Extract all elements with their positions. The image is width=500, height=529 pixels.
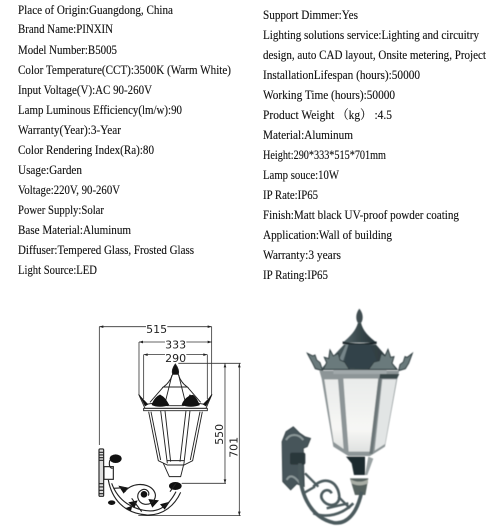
dimension arrowheads [99, 325, 241, 516]
right specification list: Product Weight （kg） :4.5 [263, 108, 392, 122]
dimension labels: 333 [165, 339, 186, 352]
right specification list: Lighting solutions service:Lighting and circuitry [263, 28, 480, 42]
left specification list: Brand Name:PINXIN [18, 22, 113, 36]
left specification list: Diffuser:Tempered Glass, Frosted Glass [18, 243, 194, 257]
right specification list: Material:Aluminum [263, 128, 353, 142]
left specification list: Power Supply:Solar [18, 203, 105, 217]
left specification list: Warranty(Year):3-Year [18, 123, 122, 137]
lantern finial [356, 309, 363, 323]
right specification list: Finish:Matt black UV-proof powder coating [263, 208, 460, 222]
right specification list: Working Time (hours):50000 [263, 88, 395, 102]
wall bracket and scroll arm [99, 449, 181, 515]
left specification list: Light Source:LED [18, 263, 97, 277]
roof ornaments [307, 349, 412, 371]
left specification list: Color Temperature(CCT):3500K (Warm White) [18, 63, 231, 77]
dimension labels: 515 [146, 323, 167, 336]
scroll arm [300, 463, 362, 523]
lantern neck [346, 457, 365, 475]
right specification list: Warranty:3 years [263, 248, 341, 262]
lamp ornaments [108, 395, 212, 511]
dimension drawing of lamp [99, 323, 241, 516]
left specification list: Lamp Luminous Efficiency(lm/w):90 [18, 103, 182, 117]
right specification list: Support Dimmer:Yes [263, 8, 358, 22]
right specification list: Application:Wall of building [263, 228, 393, 242]
dimension labels [146, 323, 241, 458]
dimension labels: 290 [165, 352, 186, 365]
left specification list: Usage:Garden [18, 163, 83, 177]
right specification list: Lamp souce:10W [263, 168, 339, 182]
lamp line art [139, 364, 212, 477]
left specification list: Model Number:B5005 [18, 43, 117, 57]
dimension lines [99, 327, 241, 516]
left specification list: Place of Origin:Guangdong, China [18, 3, 173, 17]
left specification list: Color Rendering Index(Ra):80 [18, 143, 154, 157]
left specification list: Input Voltage(V):AC 90-260V [18, 83, 152, 97]
left specification list [18, 3, 231, 277]
frosted glass panels [324, 379, 396, 452]
right specification list: IP Rate:IP65 [263, 188, 318, 202]
left specification list: Base Material:Aluminum [18, 223, 131, 237]
lantern roof [320, 323, 398, 370]
wall plate [282, 427, 311, 490]
right specification list: IP Rating:IP65 [263, 268, 328, 282]
right specification list [263, 8, 486, 282]
right specification list: InstallationLifespan (hours):50000 [263, 68, 420, 82]
product photo of wall lantern [282, 309, 412, 523]
dimension labels: 550 [213, 424, 226, 445]
dimension labels: 701 [228, 437, 241, 458]
lantern frame [319, 371, 399, 456]
right specification list: Height:290*333*515*701mm [263, 148, 386, 162]
left specification list: Voltage:220V, 90-260V [18, 183, 120, 197]
